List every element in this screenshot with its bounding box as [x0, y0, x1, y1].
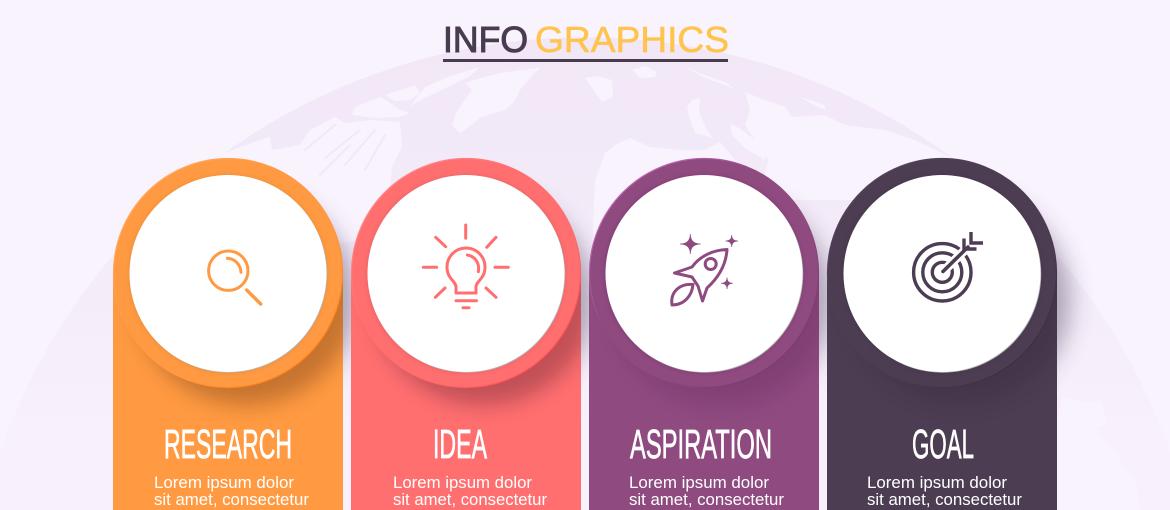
shadow on column	[133, 279, 343, 415]
column body	[589, 273, 819, 510]
heading: ASPIRATION	[630, 421, 772, 467]
body text: Lorem ipsum dolor	[629, 473, 769, 492]
icon: light bulb	[423, 225, 508, 308]
white disc edge	[130, 176, 327, 373]
ring inner shadow	[128, 174, 328, 374]
shadow on column	[650, 282, 819, 402]
column body	[351, 273, 581, 510]
drop shadows of the four circles	[144, 194, 1070, 406]
icon: rocket	[672, 234, 738, 305]
body text	[867, 473, 1022, 509]
body text	[154, 473, 309, 509]
body text: sit amet, consectetur	[867, 490, 1022, 509]
outer ring	[114, 158, 342, 388]
body text: Lorem ipsum dolor	[154, 473, 294, 492]
panel: goal	[827, 158, 1072, 510]
white disc	[606, 175, 802, 372]
shadow on column	[944, 288, 1057, 395]
shadow on column	[370, 279, 581, 416]
ring inner shadow	[842, 174, 1042, 374]
white disc edge	[606, 176, 803, 373]
outer ring	[352, 158, 580, 388]
ring inner shadow	[366, 174, 566, 374]
title	[443, 19, 729, 62]
globe with world map	[226, 38, 952, 248]
body text: sit amet, consectetur	[629, 490, 784, 509]
body text: Lorem ipsum dolor	[393, 473, 532, 492]
icon: magnifier	[209, 251, 261, 304]
heading: GOAL	[912, 421, 974, 467]
white disc	[844, 175, 1040, 372]
white disc edge	[368, 176, 565, 373]
body text: sit amet, consectetur	[393, 490, 547, 509]
column body	[827, 273, 1057, 510]
body text: Lorem ipsum dolor	[867, 473, 1007, 492]
body text	[393, 473, 547, 509]
icon: target with arrow	[914, 232, 983, 301]
heading: RESEARCH	[164, 421, 292, 467]
title underline	[443, 59, 728, 62]
title word: GRAPHICS: GRAPHICS	[535, 19, 729, 60]
ring inner shadow	[604, 174, 804, 374]
heading: IDEA	[433, 421, 487, 467]
white disc	[130, 175, 326, 372]
white disc edge	[844, 176, 1041, 373]
title word: INFO: INFO	[443, 19, 528, 60]
panel: idea	[351, 158, 596, 510]
panel: aspiration	[589, 158, 834, 510]
column body	[113, 273, 343, 510]
white disc	[368, 175, 564, 372]
panel: research	[113, 158, 358, 510]
outer ring	[590, 158, 818, 388]
body text	[629, 473, 784, 509]
outer ring	[828, 158, 1056, 388]
body text: sit amet, consectetur	[154, 490, 309, 509]
